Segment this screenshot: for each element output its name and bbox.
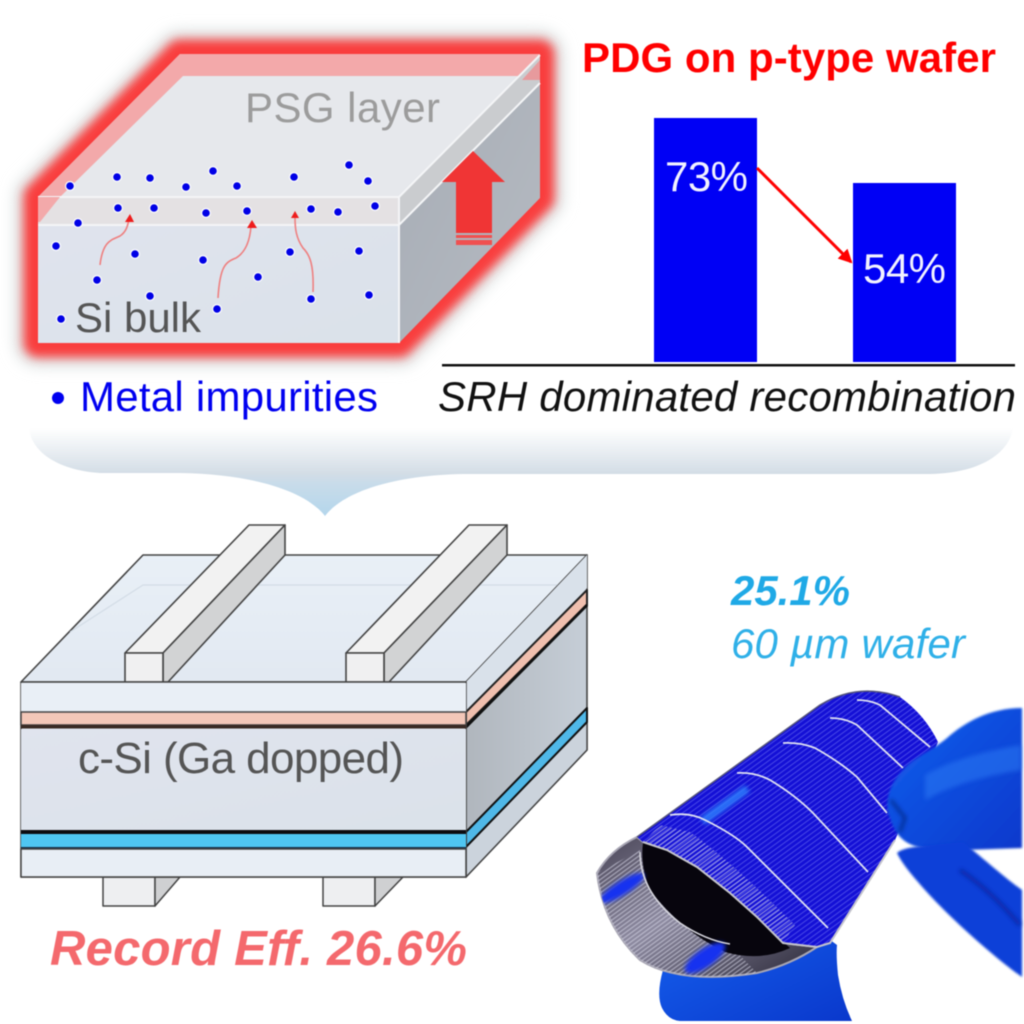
divider callout shape: [29, 428, 1013, 516]
bar chart: SRH recombination: [438, 118, 1016, 420]
metal impurity dots: [52, 161, 379, 323]
bar: 54%: [853, 183, 956, 362]
headline: record efficiency: Record Eff. 26.6%: [50, 922, 467, 976]
bar: 54%: 54%: [863, 245, 946, 292]
label: c-Si (Ga dopped): c-Si (Ga dopped): [78, 734, 404, 783]
arrow: decrease: [757, 168, 851, 262]
front blue layer: [21, 830, 466, 849]
lower glove: [659, 925, 852, 1021]
legend: metal impurities: Metal impurities: [80, 373, 378, 420]
label: PSG layer: PSG layer: [245, 84, 440, 131]
axis line: [442, 364, 1015, 366]
solar cell diagram: [21, 525, 587, 906]
front top layer: [21, 683, 466, 712]
label: Si bulk: Si bulk: [75, 294, 202, 341]
front pink layer: [21, 712, 466, 725]
right face pink layer: [466, 590, 587, 725]
top finger 1: [125, 525, 285, 682]
front face: [21, 682, 466, 877]
top face: [21, 555, 587, 682]
right face: [466, 555, 587, 877]
bar: 73%: [654, 118, 757, 362]
back corner pink: [522, 60, 540, 80]
right face PSG band: [399, 55, 540, 225]
front PSG band: [38, 197, 399, 225]
front bottom layer: [21, 849, 466, 877]
label: 25.1%: 25.1%: [730, 567, 850, 614]
bar: 73%: 73%: [665, 153, 748, 200]
wafer inner surface: [597, 837, 817, 977]
inner surface details: [596, 843, 790, 979]
impurity diffusion arrows: [100, 211, 313, 298]
wafer front surface: [636, 690, 939, 948]
red glow halo: [38, 54, 540, 343]
busbars: [670, 700, 930, 928]
right glove: thumb and fingers: [887, 708, 1022, 850]
top face: [38, 54, 540, 197]
label: 60 µm wafer: 60 µm wafer: [731, 620, 967, 667]
right face blue layer: [466, 708, 587, 847]
top finger 2: [346, 525, 507, 682]
axis caption: SRH dominated recombination: [438, 373, 1016, 420]
bottom contacts: [103, 877, 403, 906]
front face Si bulk: [38, 197, 399, 343]
pink corner of PSG band: [38, 197, 60, 222]
photo: flexible silicon wafer held by gloved hand: [590, 670, 1022, 1021]
big red up arrow: [442, 151, 505, 245]
right face: [399, 55, 540, 343]
front Si layer: [21, 729, 466, 830]
heading: PDG on p-type wafer: PDG on p-type wafer: [582, 34, 996, 81]
translucent pink band: [38, 54, 540, 222]
panel: PSG wafer block: [38, 54, 540, 343]
